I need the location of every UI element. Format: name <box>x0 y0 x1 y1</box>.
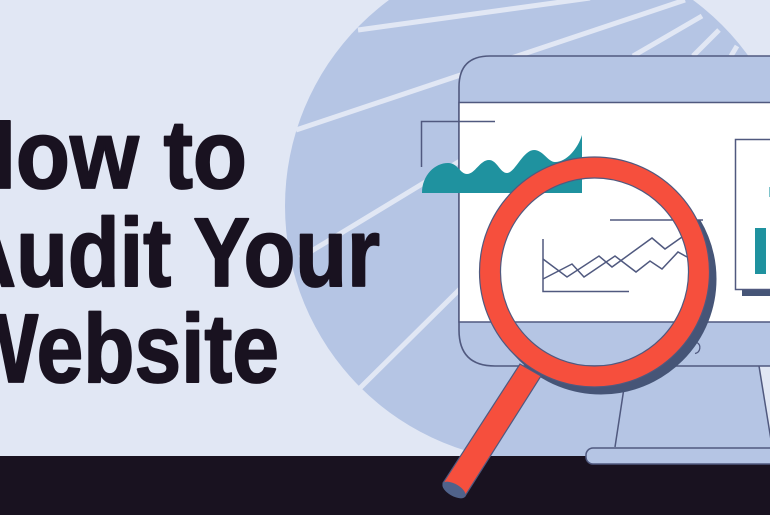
dark footer band <box>0 456 770 515</box>
stand base <box>586 448 770 464</box>
title <box>0 100 380 403</box>
monitor <box>459 56 770 464</box>
handle end cap <box>440 478 468 502</box>
card shadow <box>742 289 770 296</box>
red ring <box>490 168 699 376</box>
line chart in lens <box>543 220 703 292</box>
monitor body <box>459 56 770 366</box>
monitor screen <box>459 102 770 322</box>
lens shadow <box>513 220 716 394</box>
ring outlines <box>480 157 710 387</box>
handle <box>443 364 541 496</box>
teal area chart <box>422 135 582 193</box>
teal bar <box>755 228 766 274</box>
background sunburst circle <box>285 0 770 462</box>
power button outline <box>695 342 700 354</box>
magnifying glass <box>440 157 710 502</box>
teal mark <box>769 187 770 197</box>
chart bracket <box>422 122 495 167</box>
right card <box>736 140 770 296</box>
card frame <box>736 140 770 290</box>
monitor stand <box>615 366 770 450</box>
